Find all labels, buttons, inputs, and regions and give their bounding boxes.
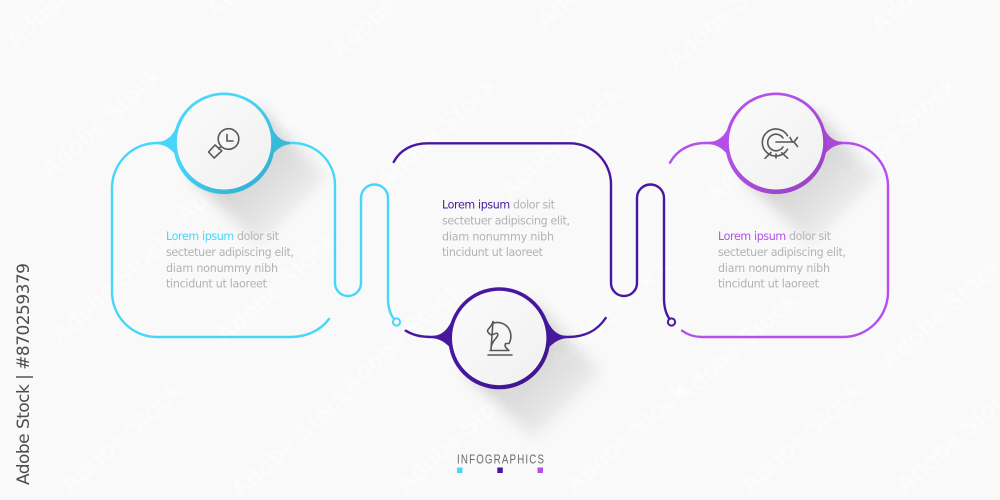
stock watermarks: Adobe Stock: [370, 71, 503, 194]
text block: Lorem ipsum dolor sit: [718, 230, 832, 243]
text block: Lorem ipsum dolor sit: [442, 198, 556, 212]
footer label: [457, 453, 544, 473]
text block: tincidunt ut laoreet: [442, 246, 544, 259]
left flare: [710, 126, 732, 160]
text block: Lorem ipsum dolor sit: [166, 230, 280, 243]
stock watermarks: Adobe Stock: [735, 376, 868, 499]
text block: tincidunt ut laoreet: [718, 278, 820, 290]
long shadow: [190, 108, 326, 244]
text block: tincidunt ut laoreet: [166, 278, 268, 290]
stock watermarks: Adobe Stock: [560, 376, 693, 499]
text block: [442, 198, 570, 259]
text block: sectetuer adipiscing elit,: [166, 246, 294, 259]
long shadow: [465, 303, 601, 439]
white disc: [177, 95, 271, 190]
infographics title: INFOGRAPHICS: [457, 453, 544, 467]
magenta frame line: [670, 143, 888, 337]
long shadow: [742, 108, 878, 244]
stock watermarks: Adobe Stock: [55, 376, 188, 499]
colored ring: [173, 92, 275, 194]
stock watermarks: Adobe Stock: [35, 61, 168, 184]
stock watermarks: Adobe Stock: [335, 276, 468, 399]
right flare: [820, 126, 842, 160]
stock watermarks: Adobe Stock: [830, 71, 963, 194]
left flare: [158, 126, 180, 160]
stock watermarks: Adobe Stock: [210, 226, 343, 349]
stock watermarks: Adobe Stock: [390, 376, 523, 499]
text block: sectetuer adipiscing elit,: [718, 246, 846, 259]
text block: diam nonummy nibh: [718, 262, 830, 275]
stock watermarks: Adobe Stock: [700, 86, 833, 209]
blue end dot: [393, 318, 400, 326]
legend square: blue: [457, 468, 462, 473]
text block: diam nonummy nibh: [442, 230, 554, 244]
right flare: [543, 320, 566, 354]
indigo connector line and frame: [394, 143, 670, 337]
text block: sectetuer adipiscing elit,: [442, 214, 570, 228]
right flare: [268, 126, 290, 160]
stock watermarks: Adobe Stock: [545, 251, 678, 374]
white disc: [729, 95, 823, 190]
panel: step 2 (indigo): [394, 143, 675, 439]
colored ring: [725, 92, 827, 194]
icon: target with arrow: [762, 129, 798, 158]
white disc: [452, 291, 546, 385]
blue connector line and frame: [112, 143, 394, 337]
text block: [718, 230, 846, 290]
indigo end dot: [668, 318, 675, 326]
icon: magnifier with clock: [208, 129, 239, 158]
left flare: [433, 320, 456, 354]
legend square: indigo: [497, 468, 503, 473]
stock watermarks: Adobe Stock: [170, 106, 303, 229]
panel: step 1 (blue): [112, 92, 400, 337]
icon: chess knight: [488, 322, 512, 355]
stock watermarks: Adobe Stock: [45, 226, 178, 349]
colored ring: [448, 287, 550, 389]
text block: diam nonummy nibh: [166, 262, 278, 275]
stock watermarks: Adobe Stock: [670, 286, 803, 409]
text block: [166, 230, 294, 290]
legend square: magenta: [538, 468, 543, 473]
stock id side text: Adobe Stock | #870259379: [14, 263, 34, 485]
stock watermarks: Adobe Stock: [495, 81, 628, 204]
panel: step 3 (magenta): [670, 92, 888, 337]
